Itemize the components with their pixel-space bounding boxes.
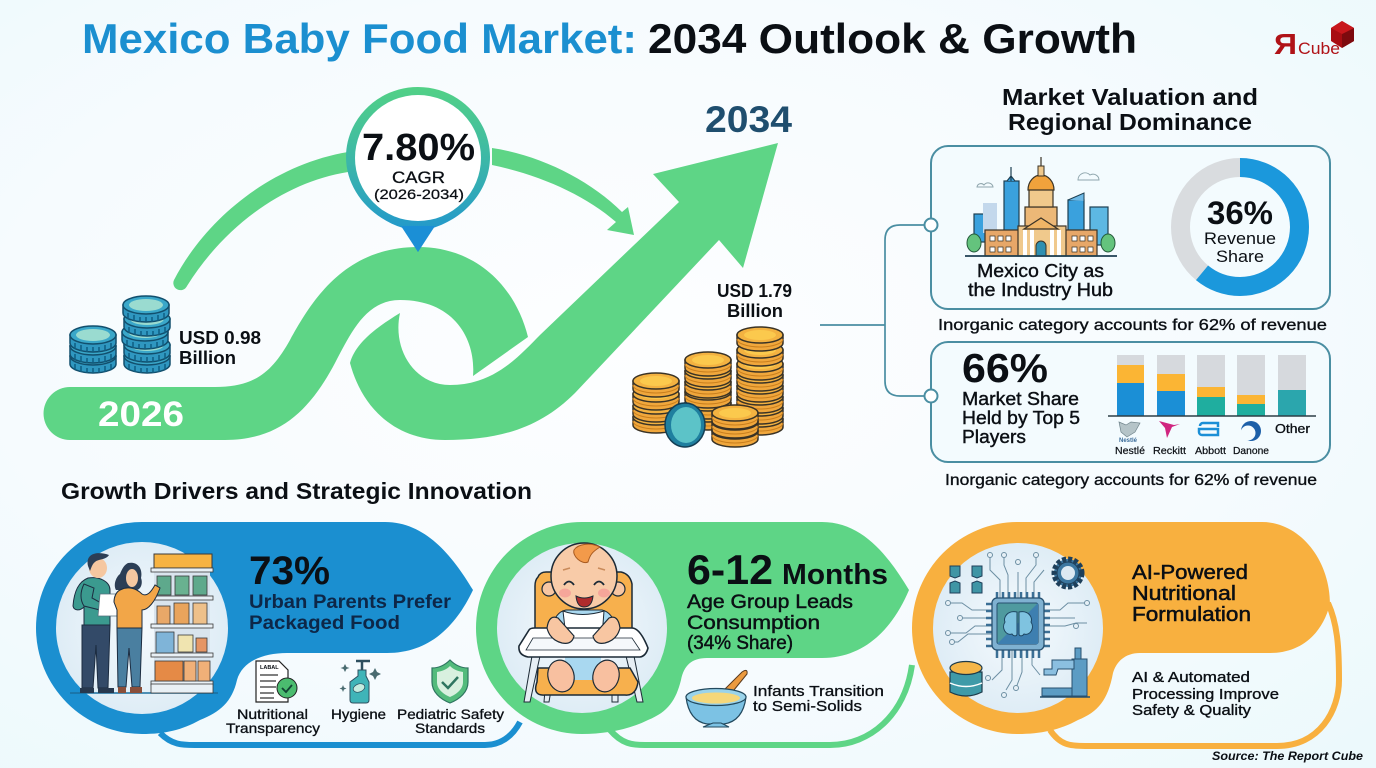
statistic: 6-12 months — [687, 546, 888, 654]
text: automated processing: AI & Automated — [1132, 669, 1250, 686]
curved CAGR arrow — [173, 148, 634, 290]
label: pediatric safety — [397, 706, 504, 736]
heading: AI-powered — [1132, 562, 1251, 626]
value label 2034: USD 1.79 — [717, 281, 792, 301]
illustration: parents at shelf — [70, 553, 218, 693]
title — [82, 15, 1137, 62]
statistic: 6-12 months: 6-12 — [687, 546, 773, 593]
statistic: 6-12 months: (34% Share) — [687, 633, 793, 654]
bar chart brand labels: Danone — [1233, 446, 1269, 457]
icon: hygiene bottle — [340, 661, 381, 703]
CAGR callout pin: 7.80% — [362, 127, 475, 169]
icon: gold coin stacks — [633, 327, 783, 447]
panel: urban parents — [36, 522, 520, 745]
text: automated processing: Processing Improve — [1132, 686, 1279, 703]
statistic: 73%: Urban Parents Prefer — [249, 592, 452, 613]
value label 2026: USD 0.98 — [179, 328, 261, 348]
market share text: 66% — [962, 345, 1048, 391]
text: inorganic category 1: Inorganic category accounts for 62% of revenue — [938, 317, 1327, 334]
statistic: 73% — [249, 549, 452, 634]
year label 2034: 2034 — [705, 99, 792, 140]
heading: market valuation: Regional Dominance — [1008, 109, 1252, 135]
statistic: 73%: 73% — [249, 549, 330, 593]
icon: blue coin stacks — [70, 296, 170, 373]
label: hygiene: Hygiene — [331, 706, 386, 722]
heading: market valuation: Market Valuation and — [1002, 84, 1258, 110]
panel: infant age group — [476, 522, 912, 745]
CAGR callout pin — [346, 87, 490, 252]
source note: Source: The Report Cube — [1212, 749, 1363, 763]
donut chart — [1180, 168, 1300, 286]
connector bracket — [820, 225, 925, 396]
statistic: 73%: Packaged Food — [249, 613, 400, 634]
icon: nutrition label — [256, 661, 297, 702]
text: automated processing — [1132, 669, 1279, 719]
value label 2034 — [717, 281, 792, 321]
statistic: 6-12 months: Age Group Leads — [687, 592, 853, 613]
logo: RCube: Cube — [1298, 39, 1340, 58]
value label 2034: Billion — [727, 301, 783, 321]
donut chart: Revenue — [1204, 229, 1276, 248]
label: pediatric safety: Pediatric Safety — [397, 706, 504, 722]
logo: RCube: Я — [1274, 29, 1297, 61]
heading: AI-powered: Formulation — [1132, 604, 1251, 626]
title: Mexico Baby Food Market: — [82, 15, 637, 62]
market share text — [962, 345, 1080, 447]
CAGR callout pin: CAGR — [392, 168, 445, 187]
logo: RCube — [1274, 21, 1354, 61]
caption: Mexico City — [968, 261, 1113, 300]
label: nutritional transparency — [226, 706, 320, 736]
text: semi-solids — [753, 683, 884, 715]
bar chart brand labels: Nestlé — [1115, 446, 1145, 457]
text: inorganic category 2: Inorganic category accounts for 62% of revenue — [945, 472, 1317, 489]
heading: market valuation — [1002, 84, 1258, 135]
bar chart brand labels — [1115, 421, 1311, 457]
bar chart brand labels: Abbott — [1195, 446, 1226, 457]
label: nutritional transparency: Nutritional — [237, 706, 308, 722]
icon: bowl and spoon — [686, 670, 747, 727]
icon: city skyline — [965, 157, 1117, 256]
icon: nutrition label: LABAL — [260, 665, 279, 671]
value label 2026 — [179, 328, 261, 368]
market share text: Market Share — [962, 389, 1079, 409]
CAGR callout pin: (2026-2034) — [374, 186, 464, 202]
caption: Mexico City: the Industry Hub — [968, 280, 1113, 300]
statistic: 6-12 months: Months — [782, 559, 888, 591]
text: automated processing: Safety & Quality — [1132, 702, 1252, 719]
label: pediatric safety: Standards — [415, 720, 485, 736]
panel: market share top 5 — [924, 342, 1330, 462]
value label 2026: Billion — [179, 348, 236, 368]
market share text: Players — [962, 427, 1026, 447]
caption: Mexico City: Mexico City as — [977, 261, 1104, 281]
growth arrow: winding green band — [44, 143, 778, 440]
title: 2034 Outlook & Growth — [648, 15, 1137, 62]
panel: AI-powered formulation — [912, 522, 1339, 746]
text: semi-solids: to Semi-Solids — [753, 698, 862, 715]
heading: AI-powered: Nutritional — [1132, 583, 1236, 605]
donut chart: Share — [1216, 247, 1264, 266]
bar chart brand labels: Reckitt — [1153, 446, 1186, 457]
market share text: Held by Top 5 — [962, 408, 1080, 428]
heading: AI-powered: AI-Powered — [1132, 562, 1248, 584]
illustration: baby in high chair — [519, 543, 648, 702]
panel: Mexico City revenue share — [924, 146, 1330, 309]
stacked bar chart — [1108, 355, 1316, 416]
donut chart: 36% — [1207, 195, 1273, 231]
illustration: AI chip — [946, 552, 1090, 698]
statistic: 6-12 months: Consumption — [687, 613, 820, 634]
text: semi-solids: Infants Transition — [753, 683, 884, 700]
label: nutritional transparency: Transparency — [226, 720, 320, 736]
bar chart brand labels: Other — [1275, 421, 1311, 436]
heading: growth drivers: Growth Drivers and Strategic Innovation — [61, 478, 532, 504]
icon: safety shield — [432, 660, 468, 703]
bar chart brand labels: Nestlé — [1119, 438, 1138, 444]
year label 2026: 2026 — [98, 395, 184, 434]
